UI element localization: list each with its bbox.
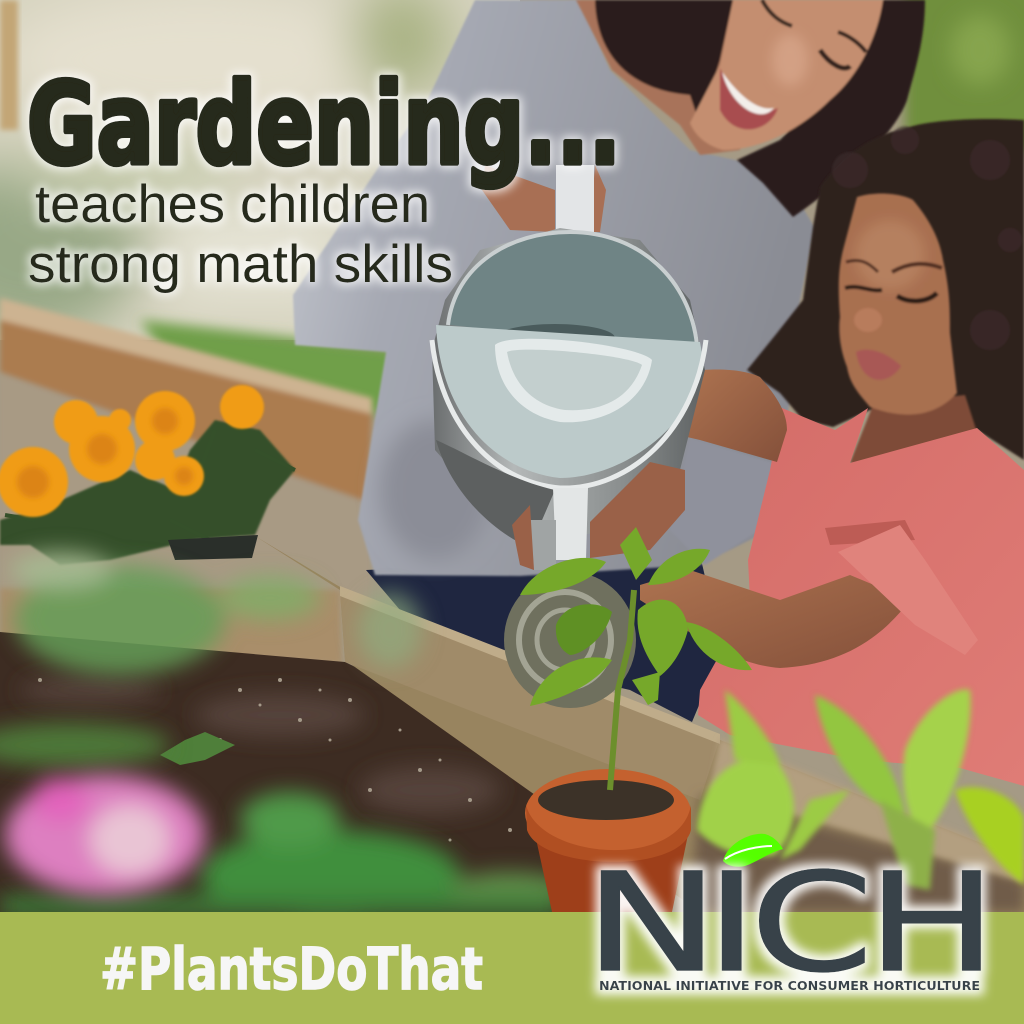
photo: child arms	[640, 369, 910, 668]
subtitle	[28, 175, 453, 294]
photo: child sleeve	[838, 525, 978, 655]
photo: watering can rose	[504, 572, 636, 708]
photo: pink flower	[5, 775, 205, 895]
photo: watering can	[432, 165, 706, 570]
logo wordmark and tagline: N	[584, 843, 719, 1002]
photo: seedling in pot	[520, 527, 752, 790]
photo: adult jeans	[366, 555, 722, 722]
photo: blurred right foreground seedling	[697, 689, 1024, 890]
photo: adult sweater	[293, 0, 815, 576]
logo: NICH	[584, 834, 997, 1003]
title: Gardening...	[27, 60, 621, 190]
photo: terracotta pot	[525, 769, 691, 912]
icon: logo leaf	[723, 834, 783, 867]
photo: main raised bed plank	[255, 536, 1024, 912]
photo: blurred left foreground plants	[0, 552, 570, 920]
logo wordmark and tagline	[584, 843, 997, 1003]
photo: adult face and hair	[576, 0, 925, 217]
photo: near left plank and soil	[0, 588, 590, 915]
photo: child neck and face	[839, 194, 977, 470]
logo wordmark and tagline: C	[750, 845, 873, 1003]
logo wordmark and tagline: I	[705, 843, 758, 1002]
photo: child pink shirt	[698, 408, 1024, 786]
photo: child hair	[747, 119, 1024, 460]
hashtag: #PlantsDoThat	[100, 935, 483, 1003]
subtitle: strong math skills	[28, 235, 453, 294]
subtitle: teaches children	[35, 175, 430, 234]
footer band	[0, 912, 1024, 1024]
logo wordmark and tagline: H	[867, 844, 997, 1002]
photo: far raised bed	[0, 298, 372, 600]
logo wordmark and tagline: NATIONAL INITIATIVE FOR CONSUMER HORTICULTURE	[599, 979, 980, 993]
photo: adult hand	[512, 462, 685, 570]
photo: marigold pot plant	[0, 385, 295, 565]
